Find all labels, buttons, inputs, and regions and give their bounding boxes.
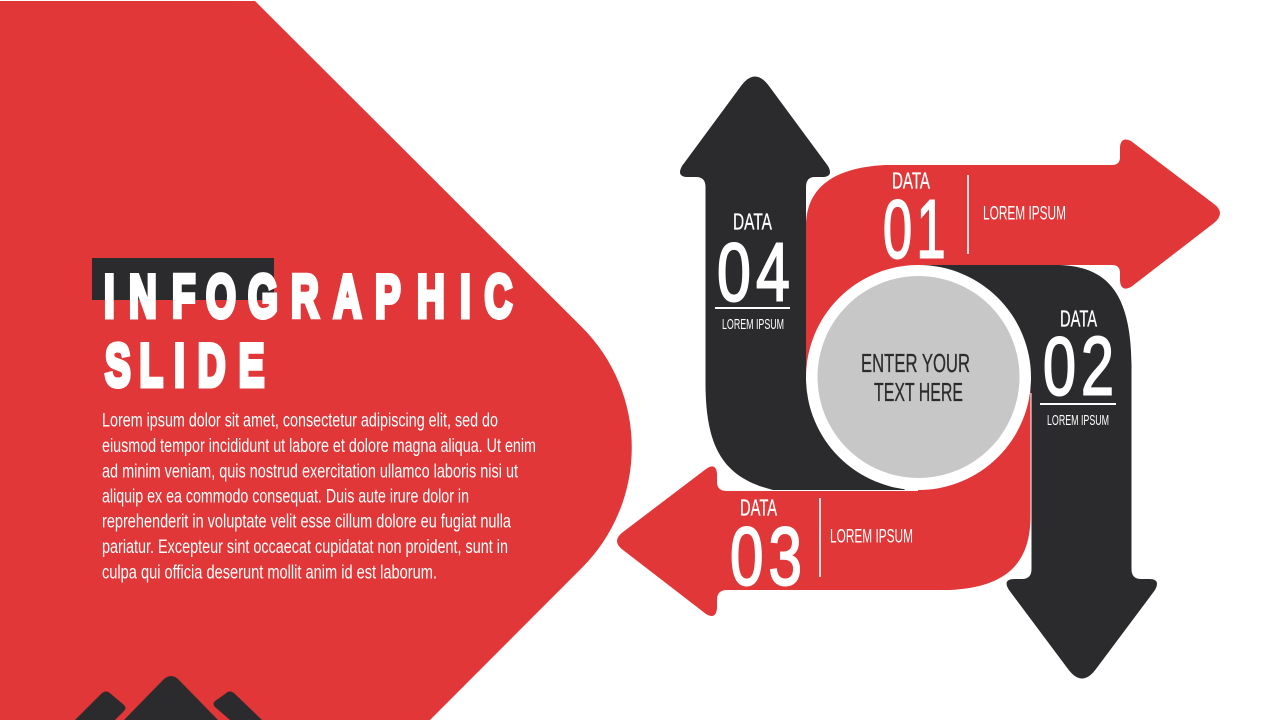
center text: ENTER YOUR	[861, 348, 970, 378]
label: data 04: LOREM IPSUM	[722, 317, 784, 333]
label: data 01: LOREM IPSUM	[983, 202, 1066, 224]
body text: reprehenderit in voluptate velit esse cillum dolore eu fugiat nulla	[102, 510, 511, 532]
icon: mountains	[75, 676, 262, 720]
body text: ad minim veniam, quis nostrud exercitation ullamco laboris nisi ut	[102, 460, 518, 482]
label: data 03: LOREM IPSUM	[830, 526, 913, 548]
label: data 02	[1040, 305, 1119, 429]
arrow: red left arrow 03	[617, 375, 1030, 616]
arrow: black up arrow 04	[680, 76, 905, 490]
heading accent block	[92, 258, 274, 300]
body text: culpa qui officia deserunt mollit anim id est laborum.	[102, 562, 437, 584]
panel: red background shape	[0, 1, 632, 720]
title	[104, 262, 512, 399]
label: data 02: LOREM IPSUM	[1047, 413, 1109, 429]
label: data 03	[730, 494, 913, 602]
label: data 02: DATA	[1060, 305, 1097, 331]
center circle	[818, 276, 1020, 478]
body text: pariatur. Excepteur sint occaecat cupidatat non proident, sunt in	[102, 536, 508, 558]
center text	[861, 348, 970, 407]
arrow: black down arrow 02	[918, 265, 1157, 678]
body text: aliquip ex ea commodo consequat. Duis aute irure dolor in	[102, 486, 469, 508]
label: data 04: 04	[717, 226, 795, 318]
label: data 01	[883, 167, 1066, 276]
label: data 01: 01	[883, 182, 950, 276]
title: SLIDE	[105, 331, 264, 399]
body text: Lorem ipsum dolor sit amet, consectetur adipiscing elit, sed do	[102, 410, 498, 432]
arrow: red right arrow 01	[806, 139, 1220, 380]
label: data 03: DATA	[740, 494, 777, 520]
body text: eiusmod tempor incididunt ut labore et dolore magna aliqua. Ut enim	[102, 435, 536, 457]
label: data 01: DATA	[892, 167, 930, 193]
label: data 04: DATA	[733, 208, 772, 234]
label: data 02: 02	[1043, 320, 1119, 412]
label: data 04	[715, 208, 795, 333]
center circle ring	[806, 265, 1031, 490]
center text: TEXT HERE	[874, 377, 963, 407]
body text	[102, 410, 536, 584]
title: INFOGRAPHIC	[104, 262, 512, 330]
label: data 03: 03	[730, 510, 807, 602]
